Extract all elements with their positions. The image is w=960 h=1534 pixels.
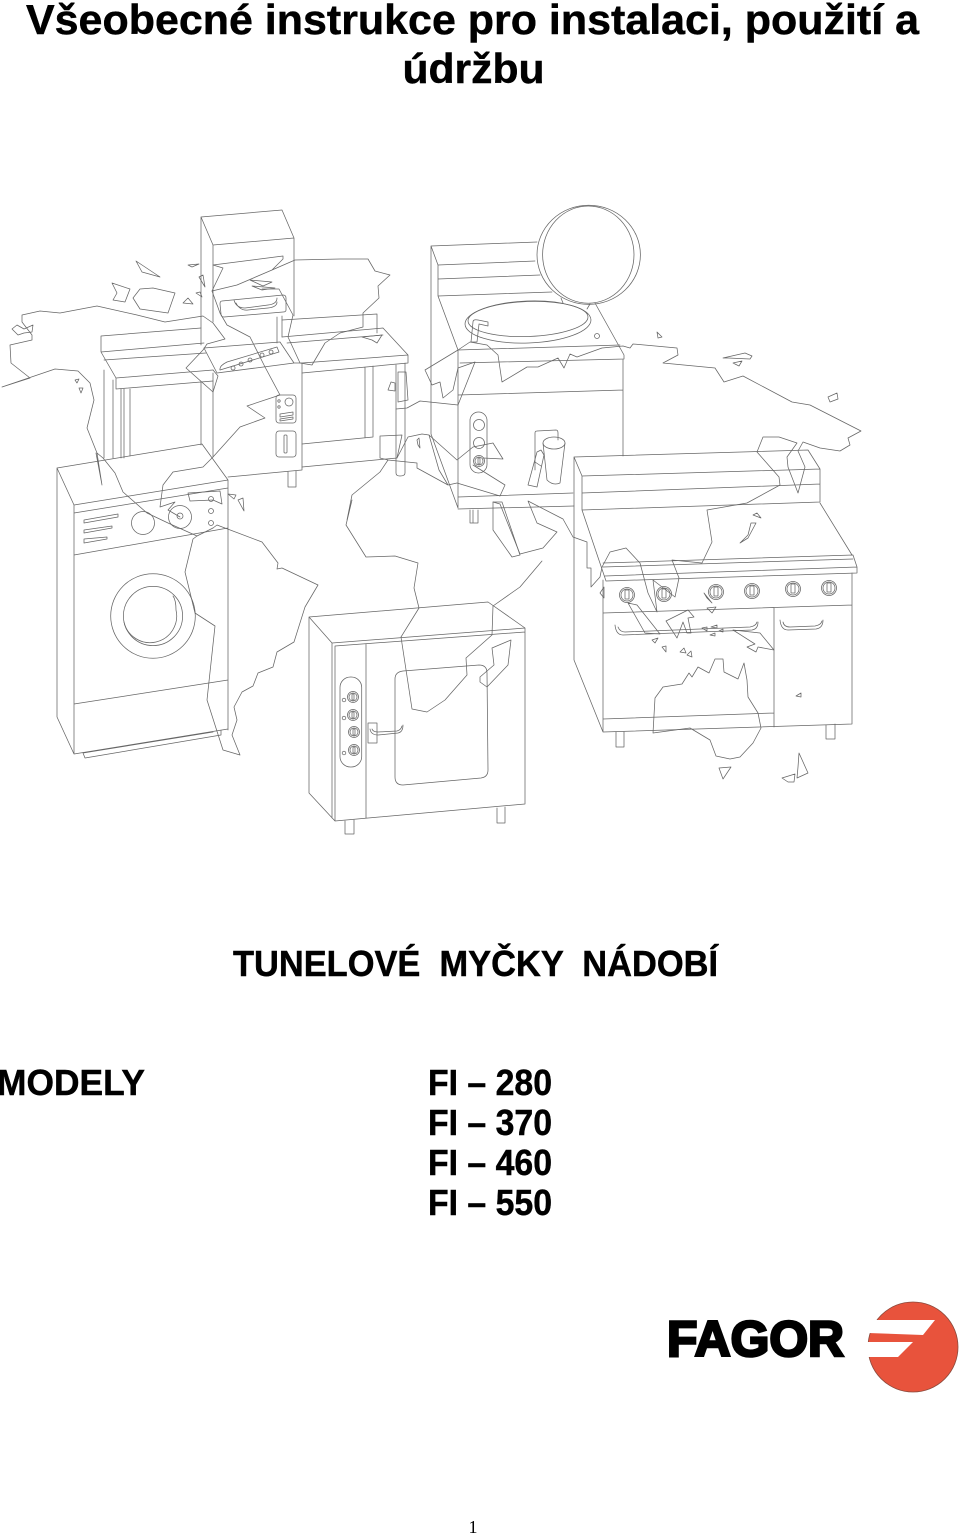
appliance: washing machine bbox=[57, 444, 228, 758]
Australia and New Zealand bbox=[653, 659, 808, 782]
title bbox=[26, 0, 920, 92]
world map outline bbox=[2, 256, 861, 782]
models label: MODELY bbox=[0, 1062, 145, 1103]
logo wordmark: FAGOR bbox=[667, 1311, 844, 1367]
Red Sea coast and Madagascar bbox=[480, 502, 520, 687]
model list: FI – 280 bbox=[428, 1062, 552, 1103]
North America bbox=[2, 291, 280, 536]
islands bbox=[12, 261, 838, 697]
title: údržbu bbox=[402, 45, 544, 92]
Africa and Europe bbox=[346, 434, 542, 712]
appliance: combi oven bbox=[309, 602, 525, 834]
model list: FI – 460 bbox=[428, 1142, 552, 1183]
logo emblem bbox=[860, 1302, 958, 1392]
FAGOR logo bbox=[667, 1302, 958, 1392]
appliance: dishwasher hood and tables bbox=[101, 210, 408, 487]
appliance: round kettle bbox=[431, 205, 640, 523]
model list: FI – 370 bbox=[428, 1102, 552, 1143]
burner knobs bbox=[620, 588, 634, 602]
appliance: range cooker with burners bbox=[574, 450, 857, 747]
model list bbox=[428, 1062, 552, 1223]
South America bbox=[185, 525, 318, 755]
model list: FI – 550 bbox=[428, 1182, 552, 1223]
Eurasia bbox=[396, 342, 861, 612]
product heading: TUNELOVÉ MYČKY NÁDOBÍ bbox=[233, 942, 719, 984]
Greenland and Arctic bbox=[212, 256, 390, 365]
illustration: kitchen appliances over world map bbox=[2, 205, 861, 834]
